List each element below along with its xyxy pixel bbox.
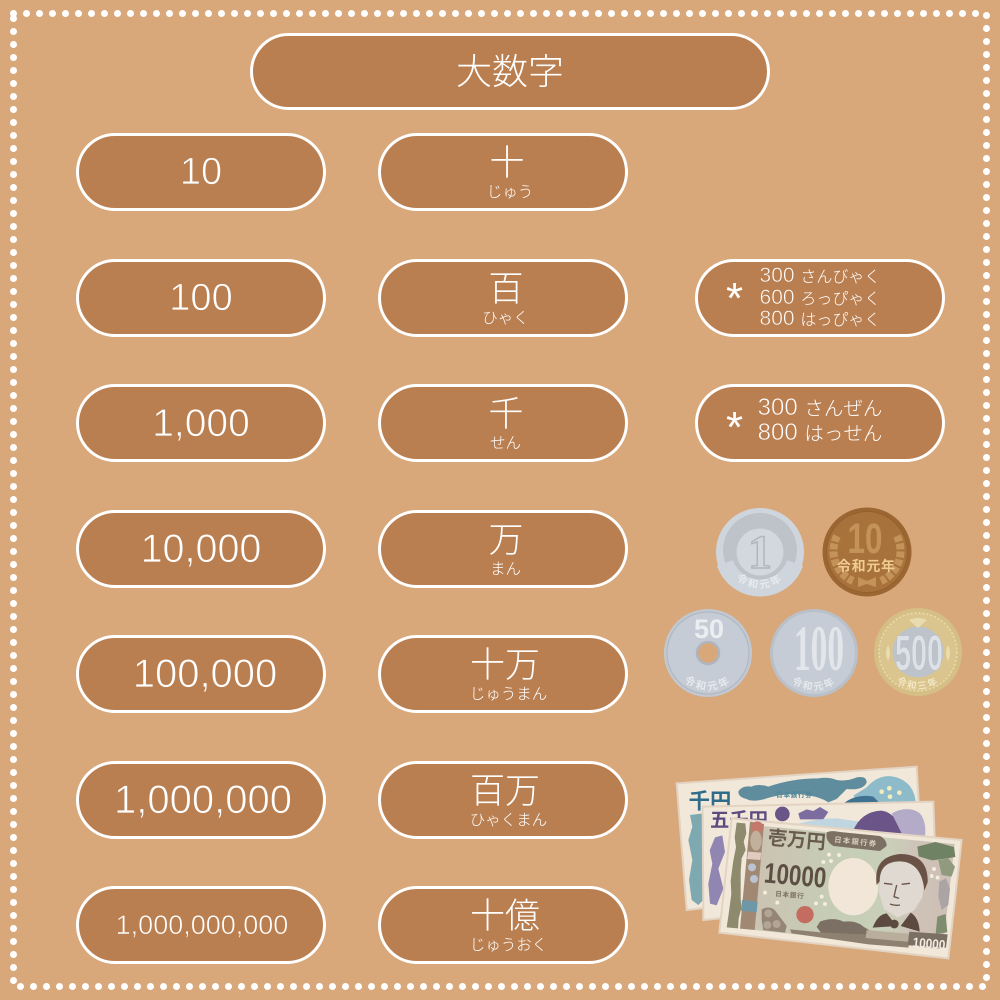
right ornaments: [917, 842, 955, 860]
kanji: 百: ひゃく: [482, 306, 529, 328]
number: 10,000: 10,000: [141, 527, 261, 571]
note: hundreds readings: [695, 259, 945, 337]
kanji: 百万: 百万: [470, 763, 540, 814]
number: 1,000: 1,000: [152, 402, 250, 445]
banknote: 10000 yen: 日本銀行: [775, 888, 805, 901]
kanji: 十: 十: [489, 135, 524, 186]
kanji: 十: [378, 133, 628, 211]
number: 10: [76, 133, 326, 211]
kanji: 千: [378, 384, 628, 462]
number: 100,000: 100,000: [133, 652, 277, 696]
coin: 500 yen: 500: [895, 625, 943, 681]
banknote: 10000 yen: 10000: [763, 857, 828, 895]
kanji: 万: [378, 510, 628, 588]
banknote: 1000 yen: 日本銀行券: [776, 789, 813, 799]
number: 1,000,000: 1,000,000: [114, 778, 292, 822]
note: hundreds readings: 300 さんびゃく: [760, 263, 880, 287]
number: 100: 100: [169, 277, 233, 319]
left ornament column: [727, 823, 746, 928]
coin: 10 yen: 10: [848, 515, 882, 563]
note: hundreds readings: 600 ろっぴゃく: [760, 284, 880, 308]
number: 10,000: [76, 510, 326, 588]
left decorated strip: [740, 822, 764, 930]
kanji: 十億: [378, 886, 628, 964]
note: hundreds readings: 800 はっぴゃく: [760, 306, 880, 330]
coin: 50 yen: 令和元年: [686, 676, 729, 692]
kanji: 百: [378, 259, 628, 337]
number: 1,000,000,000: 1,000,000,000: [116, 910, 288, 940]
note: thousands readings: [695, 384, 945, 462]
coin: 1 yen: 令和元年: [738, 574, 781, 590]
note: thousands readings: 300 さんぜん: [758, 392, 882, 421]
kanji: 十億: 十億: [470, 888, 540, 939]
coin: 50 yen: 50: [694, 614, 724, 644]
coin: 10 yen: 令和元年: [837, 556, 895, 576]
banknote: 1000 yen: [677, 767, 923, 910]
portrait: [879, 857, 925, 917]
banknote: 5000 yen: 五千円: [710, 805, 768, 833]
kanji: 万: 万: [488, 512, 524, 563]
number: 100: [76, 259, 326, 337]
number: 1,000,000: [76, 761, 326, 839]
kanji: 十万: じゅうまん: [470, 682, 547, 704]
title: [250, 33, 770, 110]
number: 10: 10: [180, 151, 222, 193]
kanji: 十: じゅう: [487, 180, 533, 202]
number: 1,000,000,000: [76, 886, 326, 964]
number: 100,000: [76, 635, 326, 713]
kanji: 百万: ひゃくまん: [470, 808, 547, 830]
coin: 10 yen: [822, 508, 912, 596]
kanji: 百万: [378, 761, 628, 839]
title: 大数字: [456, 43, 564, 95]
coin: 1 yen: [716, 508, 804, 596]
banknote: 10000 yen: 10000: [912, 935, 946, 953]
coin: 50 yen: [664, 609, 752, 697]
coin: 500 yen: [874, 608, 962, 696]
banknote: 10000 yen: 日本銀行券: [834, 834, 878, 850]
coin: 100 yen: [770, 609, 858, 697]
kanji: 十万: 十万: [470, 637, 540, 688]
kanji: 万: まん: [490, 557, 521, 579]
kanji: 十万: [378, 635, 628, 713]
kanji: 千: 千: [488, 386, 524, 437]
coin: 500 yen: 令和三年: [898, 677, 937, 690]
note: hundreds readings: *: [726, 274, 743, 323]
note: thousands readings: 800 はっせん: [758, 417, 882, 446]
kanji: 百: 百: [488, 261, 524, 312]
coin: 100 yen: 令和元年: [794, 678, 834, 692]
kanji: 千: せん: [490, 431, 521, 453]
number: 1,000: [76, 384, 326, 462]
note: thousands readings: *: [726, 403, 743, 452]
banknote: 10000 yen: [719, 818, 962, 958]
coin: 1 yen: 1: [748, 526, 772, 579]
banknote: 5000 yen: [703, 802, 937, 920]
banknote: 1000 yen: 千円: [689, 785, 731, 816]
coin: 100 yen: 100: [794, 613, 844, 685]
banknote: 10000 yen: 壱万円: [767, 822, 827, 855]
kanji: 十億: じゅうおく: [470, 933, 547, 955]
